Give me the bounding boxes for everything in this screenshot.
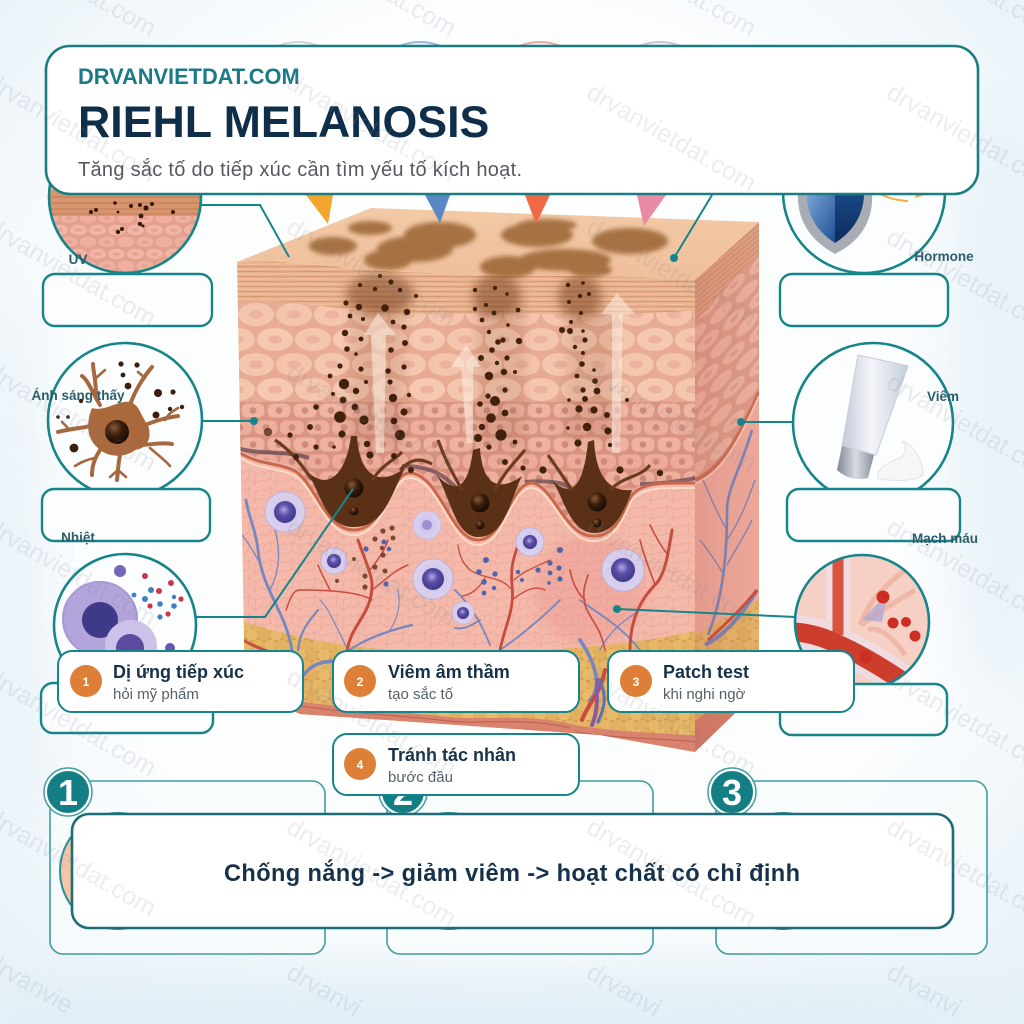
summary banner [72, 814, 953, 928]
circle: blood vessels [794, 554, 930, 683]
card 4 [333, 734, 579, 795]
watermark: drvanvi [282, 958, 366, 1022]
watermark: drvanvietdat.com [582, 663, 761, 782]
epidermis [230, 255, 700, 548]
circle: cosmetic tube [793, 343, 953, 503]
lower dermal band [295, 702, 695, 752]
translucent upward arrows [364, 293, 635, 453]
card 2: 2 [357, 675, 364, 689]
immune cells [265, 492, 644, 624]
card 2: Viêm âm thầm [388, 662, 510, 682]
watermark: drvanvietdat.com [582, 213, 761, 332]
circle: shield protection [783, 111, 945, 273]
trigger labels: Hormone [914, 249, 974, 264]
bottom panels [44, 768, 987, 954]
watermark: drvanvietdat.com [582, 513, 761, 632]
summary banner: Chống nắng -> giảm viêm -> hoạt chất có chỉ định [224, 859, 800, 887]
blood vessels [242, 500, 672, 725]
top face of block with pigment patches [237, 208, 759, 280]
melanin granule columns [264, 274, 663, 476]
trigger labels: Ánh sáng thấy [31, 388, 125, 403]
pointer arrows from top icons [306, 195, 666, 226]
subtitle: Tăng sắc tố do tiếp xúc cần tìm yếu tố kích hoạt. [78, 158, 522, 181]
watermark: drvanvietdat.com [282, 68, 461, 187]
card 1: hỏi mỹ phẩm [113, 686, 199, 703]
callout leader lines [196, 195, 796, 617]
panel 2 [379, 768, 653, 954]
trigger labels: Viêm [927, 389, 959, 404]
dermal particles [335, 525, 563, 595]
card 1 [58, 651, 303, 712]
watermark: drvanvietdat.com [282, 213, 461, 332]
empty label boxes [41, 274, 960, 735]
panel 2: 2 [393, 772, 413, 813]
card 4: Tránh tác nhân [388, 745, 516, 765]
card 1: Dị ứng tiếp xúc [113, 662, 244, 682]
trigger labels: Mạch máu [912, 531, 978, 546]
card 2: tạo sắc tố [388, 686, 454, 703]
panel 3: 3 [722, 772, 742, 813]
watermark: drvanvietdat.com [282, 513, 461, 632]
watermark: drvanvi [582, 958, 666, 1022]
skin cross-section block [230, 208, 761, 760]
circle: epidermis close-up [48, 184, 202, 273]
title: RIEHL MELANOSIS [78, 98, 489, 147]
watermark: drvanvietdat.com [282, 663, 461, 782]
card 3: 3 [633, 675, 640, 689]
panel 3 [708, 768, 987, 954]
melanin nuclei [344, 478, 606, 530]
card 3 [608, 651, 854, 712]
watermark: drvanvietdat.com [582, 813, 761, 932]
watermark: drvanvietdat.com [582, 78, 761, 197]
dermal junction wave [240, 453, 695, 540]
panel 1: 1 [58, 772, 78, 813]
watermark: drvanvietdat.com [282, 358, 461, 477]
stratum corneum [237, 261, 695, 314]
trigger labels: UV [69, 252, 87, 267]
card 1: 1 [83, 675, 90, 689]
subcutaneous fat [240, 620, 700, 760]
circle: immune cells [52, 552, 198, 656]
card 4: 4 [357, 758, 364, 772]
card 4: bước đầu [388, 769, 453, 786]
basal dark line [237, 448, 697, 490]
peeking top icon circles behind header [243, 42, 715, 152]
dermis [230, 440, 700, 760]
circle: melanocyte [48, 343, 202, 497]
card 2 [333, 651, 579, 712]
trigger labels: Nhiệt [61, 530, 95, 545]
melanocytes [275, 436, 650, 537]
trigger labels [31, 249, 978, 546]
watermark: drvanvietdat.com [282, 813, 461, 932]
watermark: drvanvietdat.com [582, 358, 761, 477]
right face of block [695, 220, 761, 755]
callout anchor dots [250, 254, 745, 613]
card 3: khi nghi ngờ [663, 686, 746, 703]
panel 1 [44, 768, 325, 954]
header panel [46, 46, 978, 194]
card 3: Patch test [663, 662, 749, 682]
site name: DRVANVIETDAT.COM [78, 64, 300, 89]
front face of block [230, 255, 700, 760]
watermark: drvanvi [882, 958, 966, 1022]
